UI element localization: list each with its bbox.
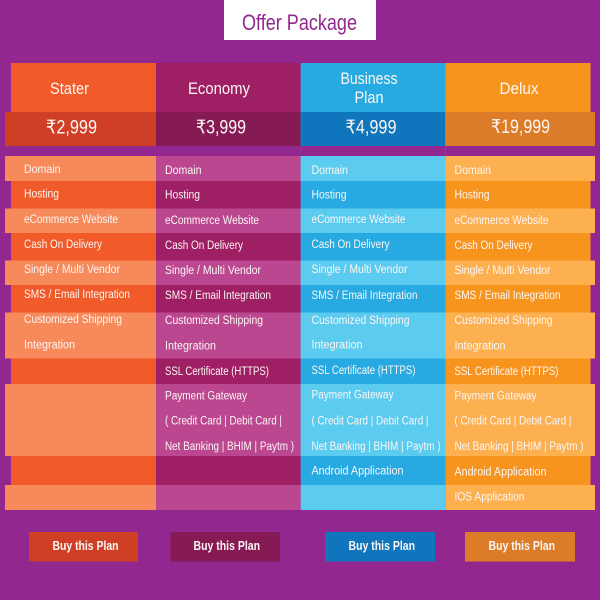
panel: Economy plan: ₹3,999 bbox=[196, 118, 246, 138]
panel: Delux plan: SSL Certificate (HTTPS) bbox=[454, 366, 559, 378]
panel: Business Plan: ( Credit Card | Debit Card | bbox=[312, 416, 428, 428]
panel: Delux plan: Domain bbox=[454, 165, 491, 177]
panel: Stater plan: eCommerce Website bbox=[24, 214, 118, 226]
panel: Economy plan: ( Credit Card | Debit Card | bbox=[165, 416, 282, 428]
panel: Stater plan: Domain bbox=[24, 164, 60, 176]
panel: Business Plan: Hosting bbox=[312, 190, 346, 202]
button: Stater buy: Buy this Plan bbox=[52, 539, 118, 553]
panel: Delux plan: Customized Shipping bbox=[454, 315, 552, 327]
button: Business buy: Buy this Plan bbox=[348, 539, 415, 553]
panel: Delux plan: IOS Application bbox=[454, 492, 524, 504]
panel: Stater plan: Integration bbox=[24, 340, 75, 352]
panel: Delux plan: Payment Gateway bbox=[454, 390, 537, 402]
panel: Economy plan: Economy bbox=[188, 79, 250, 98]
panel: Delux plan: ₹19,999 bbox=[491, 117, 550, 138]
panel: Business Plan bbox=[301, 63, 445, 510]
panel: Business Plan: Payment Gateway bbox=[312, 390, 394, 402]
panel: Stater plan: Hosting bbox=[24, 188, 59, 200]
panel: Delux plan: SMS / Email Integration bbox=[454, 290, 560, 302]
panel: Stater plan: Stater bbox=[50, 79, 89, 98]
panel: Business Plan: SMS / Email Integration bbox=[312, 290, 418, 302]
panel: Delux plan: Cash On Delivery bbox=[454, 240, 533, 252]
panel: Economy plan bbox=[156, 63, 301, 510]
button: Business buy bbox=[325, 532, 435, 562]
panel: Delux plan: Net Banking | BHIM | Paytm ) bbox=[454, 441, 584, 453]
title: Offer Package bbox=[242, 10, 357, 35]
panel: Economy plan: SMS / Email Integration bbox=[165, 290, 271, 302]
panel: Delux plan: ( Credit Card | Debit Card | bbox=[454, 416, 572, 428]
panel: Delux plan: Integration bbox=[454, 340, 506, 352]
panel: Delux plan bbox=[445, 63, 595, 510]
panel: Business Plan: eCommerce Website bbox=[312, 214, 406, 226]
panel: Business Plan: Integration bbox=[312, 340, 362, 352]
panel: Business Plan: Customized Shipping bbox=[312, 315, 410, 327]
panel: Business Plan: Single / Multi Vendor bbox=[312, 264, 408, 276]
panel: Economy plan: Domain bbox=[165, 165, 202, 177]
panel: Business Plan: Domain bbox=[312, 165, 348, 177]
panel: Business Plan: Android Application bbox=[312, 466, 404, 478]
panel: Business Plan: ₹4,999 bbox=[346, 118, 396, 138]
panel: Economy plan: Customized Shipping bbox=[165, 315, 263, 327]
panel: Business Plan: Net Banking | BHIM | Paytm ) bbox=[312, 441, 441, 453]
button: Stater buy bbox=[29, 532, 138, 562]
button: Economy buy bbox=[170, 532, 280, 562]
panel: Delux plan: eCommerce Website bbox=[454, 215, 548, 227]
panel: Delux plan: Single / Multi Vendor bbox=[454, 265, 551, 277]
panel: Business Plan: Plan bbox=[354, 88, 384, 107]
panel: Business Plan: SSL Certificate (HTTPS) bbox=[312, 365, 416, 377]
panel: Stater plan: ₹2,999 bbox=[46, 118, 97, 138]
panel: Delux plan: Android Application bbox=[454, 466, 546, 478]
button: Delux buy bbox=[465, 532, 575, 562]
panel: Stater plan bbox=[5, 63, 156, 510]
panel: Economy plan: Cash On Delivery bbox=[165, 240, 243, 252]
panel: Stater plan: Single / Multi Vendor bbox=[24, 264, 120, 276]
panel: Business Plan: Cash On Delivery bbox=[312, 239, 390, 251]
panel: Economy plan: Integration bbox=[165, 340, 216, 352]
panel: Economy plan: Payment Gateway bbox=[165, 390, 247, 402]
button: Delux buy: Buy this Plan bbox=[488, 539, 555, 553]
panel: Business Plan: Business bbox=[340, 69, 398, 88]
panel: Economy plan: eCommerce Website bbox=[165, 215, 259, 227]
panel: Economy plan: Single / Multi Vendor bbox=[165, 265, 261, 277]
button: Economy buy: Buy this Plan bbox=[194, 539, 260, 553]
panel: Economy plan: Net Banking | BHIM | Paytm ) bbox=[165, 441, 294, 453]
panel: Stater plan: SMS / Email Integration bbox=[24, 289, 130, 301]
panel: Delux plan: Delux bbox=[500, 79, 539, 98]
panel: Stater plan: Cash On Delivery bbox=[24, 239, 102, 251]
title bbox=[224, 0, 376, 40]
panel: Economy plan: SSL Certificate (HTTPS) bbox=[165, 366, 269, 378]
panel: Stater plan: Customized Shipping bbox=[24, 314, 122, 326]
panel: Delux plan: Hosting bbox=[454, 190, 490, 202]
panel: Economy plan: Hosting bbox=[165, 190, 200, 202]
